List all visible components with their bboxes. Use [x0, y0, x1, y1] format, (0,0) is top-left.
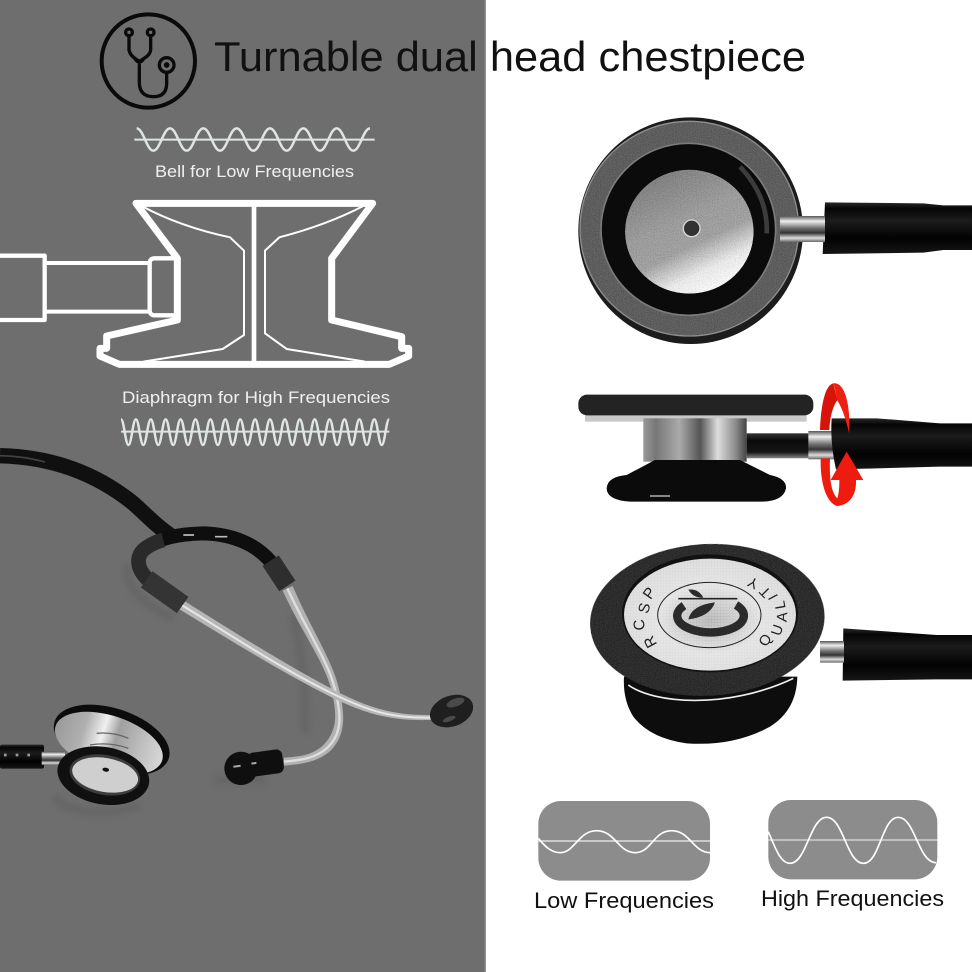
black tube	[823, 202, 972, 254]
label: low frequencies: Low Frequencies	[534, 888, 714, 913]
rim disc	[578, 117, 803, 344]
center hole	[683, 220, 700, 237]
label: high frequencies: High Frequencies	[761, 886, 944, 911]
bell underneath	[624, 677, 797, 744]
icon: red rotation arrow with tube	[820, 383, 972, 506]
engraved text RCSP	[631, 584, 661, 650]
right sleeve	[271, 561, 287, 586]
card: high frequencies waveform	[768, 800, 937, 879]
engraved text QUALITY: Y	[745, 573, 761, 591]
center divider	[247, 205, 261, 363]
label: bell for low frequencies: Bell for Low Frequencies	[155, 162, 354, 181]
main black tube	[0, 456, 170, 535]
engraved text RCSP: R	[641, 633, 661, 650]
logo bar	[678, 596, 737, 601]
logo and engraved text	[631, 573, 791, 650]
left sleeve	[147, 579, 183, 605]
engraved text RCSP: S	[635, 601, 654, 615]
photo: full stethoscope on grey	[0, 456, 478, 812]
inner right contour	[265, 206, 365, 362]
engraved text QUALITY	[745, 573, 791, 649]
label: diaphragm for high frequencies: Diaphragm for High Frequencies	[122, 388, 390, 407]
photo: chestpiece bell view	[578, 117, 972, 344]
upper disc	[585, 412, 807, 422]
black tube	[831, 418, 972, 469]
metal face	[625, 170, 754, 294]
logo leaves	[688, 602, 715, 619]
photo: chestpiece side view	[578, 395, 835, 502]
outer rim	[586, 538, 828, 702]
stem	[820, 641, 844, 663]
logo ring outline	[658, 582, 761, 648]
stem and tube outline	[0, 256, 176, 320]
engraved text QUALITY: Q	[756, 632, 776, 649]
diaphragm face	[622, 554, 798, 672]
engraved text QUALITY: A	[775, 611, 791, 623]
engraved text QUALITY: L	[772, 599, 790, 610]
small chestpiece: back disc	[45, 691, 179, 789]
diagram: chestpiece cross-section	[0, 203, 409, 364]
card: low frequencies waveform	[538, 801, 710, 881]
rubber ring	[601, 143, 776, 315]
icon: stethoscope in circle	[102, 14, 195, 108]
engraved text RCSP: C	[631, 619, 649, 631]
back arc	[820, 383, 837, 430]
right ear tip	[425, 689, 478, 733]
photo: chestpiece diaphragm view	[586, 538, 972, 744]
lower bell	[607, 460, 786, 502]
engraved text QUALITY: T	[757, 582, 775, 600]
front arc	[833, 383, 850, 434]
black tube	[843, 628, 972, 681]
high frequency wave icon	[121, 419, 389, 445]
Y yoke	[138, 533, 287, 605]
stem	[747, 433, 810, 458]
panel: white right background	[486, 0, 972, 972]
title: Turnable dual head chestpiece	[214, 33, 806, 80]
binaural metal tube left	[179, 601, 438, 720]
small chestpiece: front ring	[53, 739, 154, 812]
left ear tip	[222, 746, 286, 787]
engraved text RCSP: P	[640, 584, 660, 603]
low frequency wave icon	[134, 128, 375, 151]
small chestpiece: tube and stem	[0, 745, 44, 769]
panel: grey left background	[0, 0, 486, 972]
inner left contour	[142, 206, 244, 362]
stem	[780, 216, 825, 242]
logo C-shaped mark	[677, 605, 744, 632]
metal cylinder	[643, 418, 747, 462]
outer chestpiece outline	[100, 203, 409, 364]
binaural metal tube right	[283, 586, 343, 766]
engraved text QUALITY: U	[769, 623, 787, 638]
engraved text QUALITY: I	[766, 591, 782, 602]
lower arc and arrow	[821, 452, 863, 506]
